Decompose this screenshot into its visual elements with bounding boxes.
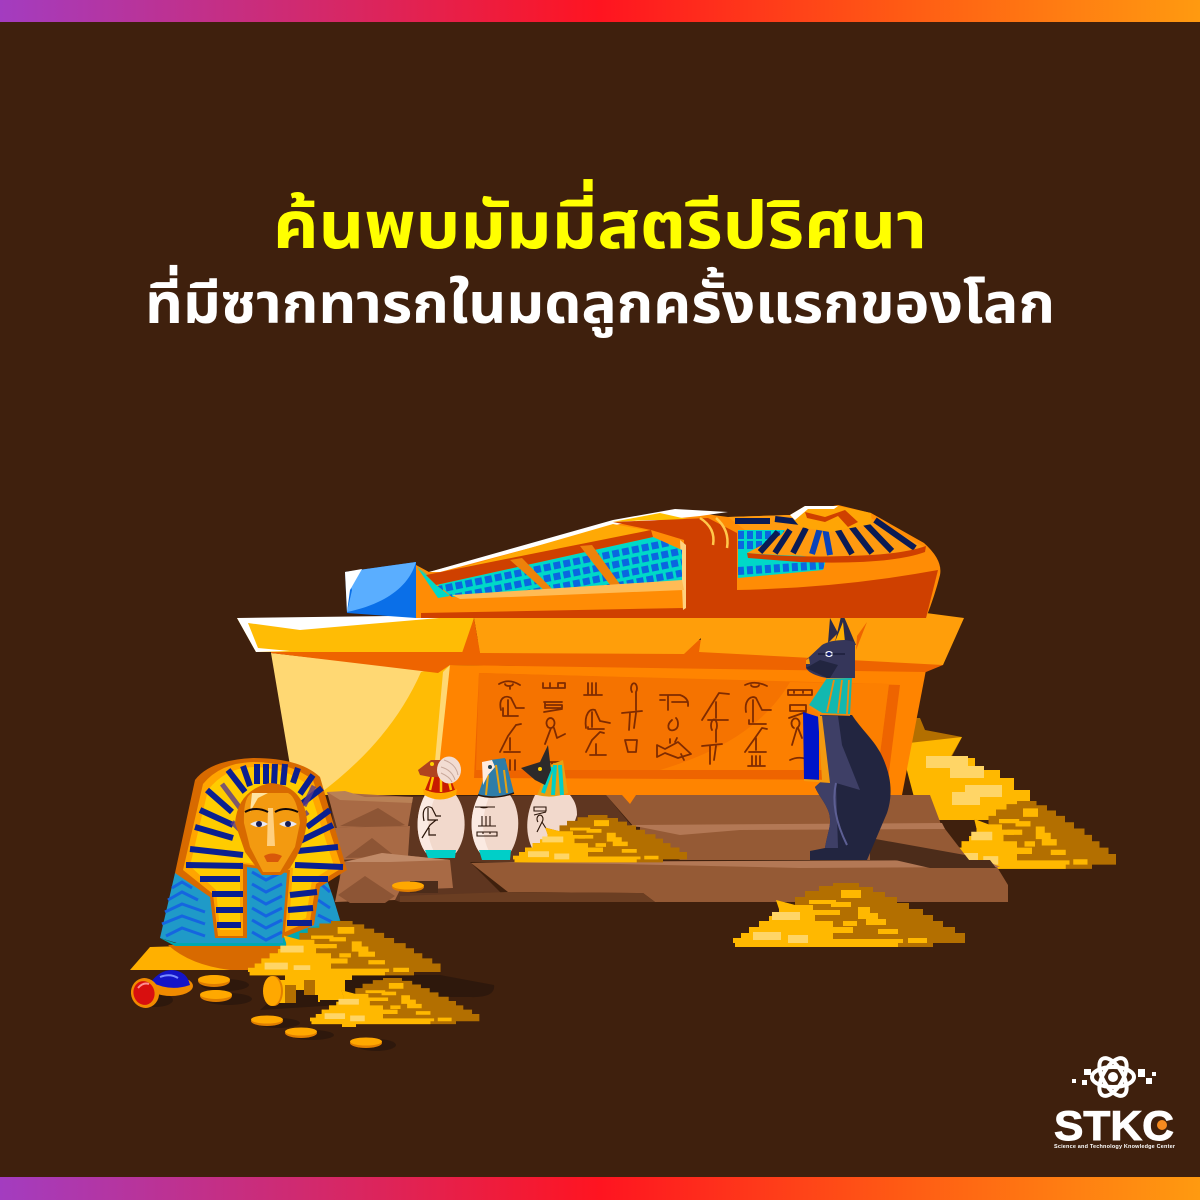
sarcophagus lid bbox=[345, 505, 940, 618]
dark orange band bbox=[421, 518, 938, 618]
foot block bbox=[345, 562, 416, 618]
title line 1: ค้นพบมัมมี่สตรีปริศนา bbox=[273, 179, 927, 262]
collar bbox=[809, 677, 852, 715]
nemes yellow bbox=[190, 767, 334, 930]
second step bbox=[640, 825, 969, 860]
logo: STKC bbox=[1054, 1054, 1176, 1150]
pharaoh bust bbox=[130, 758, 347, 970]
nemes headdress bbox=[728, 515, 924, 556]
lid body bbox=[416, 505, 940, 618]
chest lid orange slab bbox=[474, 613, 964, 665]
floor shadows bbox=[137, 975, 494, 1051]
nemes outer bbox=[175, 758, 347, 938]
face bbox=[235, 783, 307, 875]
red gem ring bbox=[128, 975, 162, 1011]
left rock strata bbox=[327, 792, 413, 828]
gold pile left lower bbox=[310, 978, 479, 1024]
inscription panel bbox=[474, 673, 900, 780]
title line 2: ที่มีซากทารกในมดลูกครั้งแรกของโลก bbox=[145, 264, 1055, 338]
coin on step bbox=[392, 881, 438, 893]
logo wordmark: STKC bbox=[1054, 1102, 1174, 1149]
canopic jar: falcon bbox=[472, 758, 518, 860]
treasure coins bbox=[198, 975, 382, 1048]
nemes stripes bbox=[186, 764, 343, 925]
teal shoulders bbox=[160, 860, 340, 944]
chest lid band bbox=[271, 640, 943, 673]
chest lid yellow slab bbox=[237, 618, 474, 652]
stone steps bbox=[327, 791, 1008, 903]
head decoration bbox=[738, 530, 826, 578]
rear shadow mass bbox=[330, 795, 660, 902]
white highlight bbox=[429, 509, 728, 572]
top gradient bar bbox=[0, 0, 1200, 22]
body bbox=[810, 715, 891, 860]
gold drip bbox=[270, 970, 352, 1003]
gold pile on steps bbox=[513, 815, 687, 862]
base bbox=[130, 943, 284, 970]
sarcophagus chest bbox=[237, 613, 964, 795]
top step bbox=[606, 795, 942, 827]
canopic jar: baboon bbox=[418, 756, 465, 858]
blue pectoral bbox=[803, 712, 819, 780]
bottom gradient bar bbox=[0, 1177, 1200, 1200]
chest left side bbox=[271, 653, 440, 795]
third step bbox=[471, 860, 1008, 902]
head bbox=[806, 640, 855, 678]
ears bbox=[828, 618, 838, 643]
gold pile behind chest, right bbox=[900, 718, 1116, 869]
gold pile left large bbox=[248, 921, 441, 975]
logo tagline: Science and Technology Knowledge Center bbox=[1054, 1144, 1176, 1150]
anubis cat statue bbox=[803, 612, 891, 860]
gold pile front bbox=[733, 883, 965, 947]
logo data dots bbox=[1072, 1069, 1156, 1085]
chest decoration teal bbox=[417, 530, 684, 599]
hieroglyphs bbox=[499, 681, 812, 770]
face lid bbox=[790, 506, 872, 532]
canopic jar: jackal bbox=[521, 745, 577, 850]
title bbox=[145, 179, 1055, 338]
logo atom icon bbox=[1092, 1054, 1134, 1100]
chest front bbox=[433, 665, 926, 795]
blue scarab gem bbox=[149, 970, 193, 996]
